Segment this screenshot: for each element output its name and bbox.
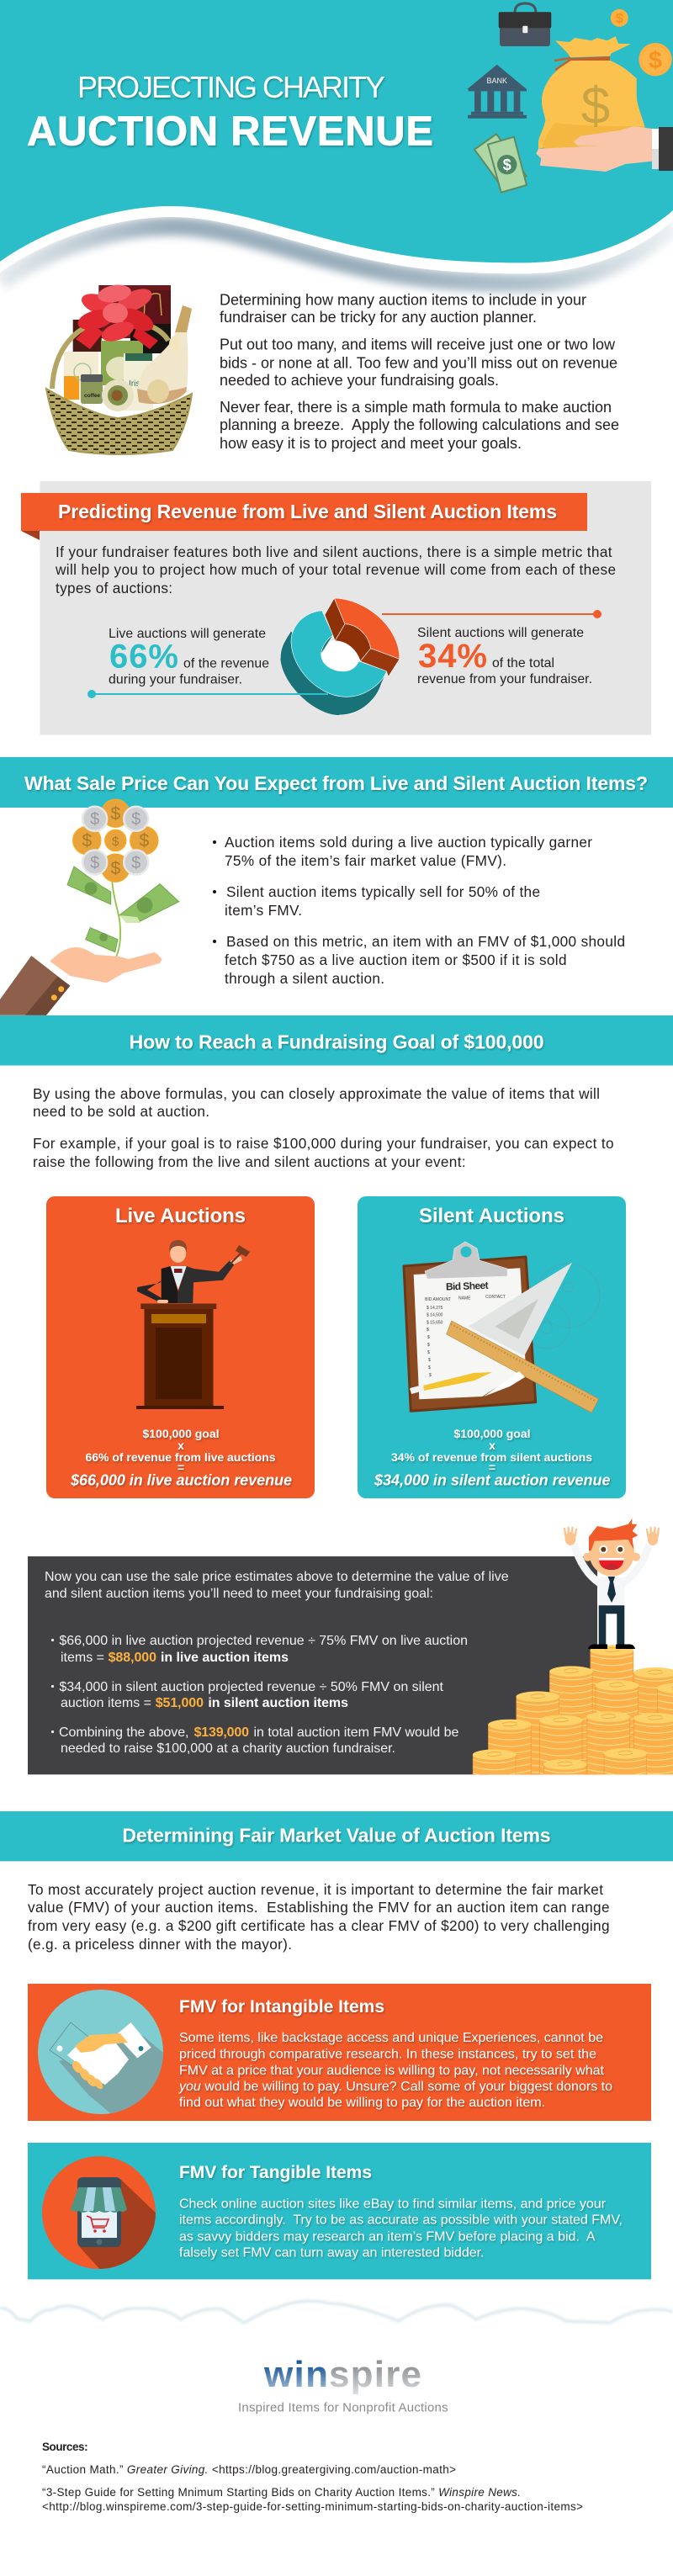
- text block: fundraising goal intro: need to be sold at auction.: [33, 1103, 209, 1120]
- callout: live auctions 66 percent: Live auctions will generate: [109, 627, 266, 641]
- text block: value calculations: $34,000 in silent auction projected revenue ÷ 50% FMV on silent: [59, 1680, 444, 1694]
- section banner: fair market value: Determining Fair Market Value of Auction Items: [122, 1824, 551, 1846]
- text block: fair market value intro: (e.g. a priceless dinner with the mayor).: [28, 1936, 292, 1953]
- callout: silent auctions 34 percent: Silent auctions will generate: [417, 626, 584, 640]
- text block: fundraising goal intro: By using the above formulas, you can closely approximate the value of items that will: [33, 1085, 600, 1102]
- icon: large coin: [639, 43, 672, 76]
- icon: dollar bills: $: [503, 156, 511, 173]
- text block: tangible items: [179, 2197, 623, 2260]
- calculation: silent auction revenue: =: [489, 1460, 495, 1474]
- calculation: silent auction revenue: $34,000 in silent auction revenue: [374, 1472, 611, 1489]
- illustration: coin stacks: [473, 1645, 673, 1775]
- title: PROJECTING CHARITY: [77, 70, 385, 104]
- tagline: Inspired Items for Nonprofit Auctions: [238, 2400, 448, 2414]
- icon: gift basket: coffee: [84, 393, 101, 399]
- text block: tangible items: as savvy bidders may research an item’s FMV before placing a bid. A: [179, 2229, 596, 2244]
- icon: clipboard bid sheet with ruler: $: [427, 1343, 430, 1348]
- icon: gift basket: [46, 283, 192, 454]
- text block: metric explanation: [55, 543, 616, 596]
- text block: tangible items: Check online auction sites like eBay to find similar items, and price your: [179, 2197, 607, 2212]
- section banner: fair market value: [0, 1811, 673, 1861]
- callout: silent auctions 34 percent: [417, 626, 592, 686]
- text block: intangible items: you would be willing to pay. Unsure? Call some of your biggest donors to: [178, 2080, 612, 2094]
- panel: FMV for tangible items: [28, 2143, 651, 2279]
- icon: clipboard bid sheet with ruler: $: [429, 1373, 432, 1378]
- decorative footer cloud edge: [0, 2301, 673, 2323]
- text block: sources: Sources:: [42, 2441, 88, 2453]
- text block: value calculations: auction items =: [61, 1696, 151, 1710]
- panel: live auctions card: [46, 1196, 315, 1498]
- icon: clipboard bid sheet with ruler: $ 14,500: [427, 1312, 443, 1317]
- panel: silent auctions card: [358, 1196, 626, 1498]
- icon: briefcase: [499, 3, 551, 46]
- logo: winspire: [238, 2354, 448, 2414]
- icon: dollar bills: [474, 134, 527, 193]
- text block: intangible items: [178, 2031, 612, 2110]
- text block: intangible items: Some items, like backstage access and unique Experiences, cannot be: [179, 2031, 603, 2045]
- icon: clipboard bid sheet with ruler: $ 15,650: [427, 1321, 443, 1326]
- icon: small coin: [611, 9, 628, 27]
- callout: live auctions 66 percent: during your fundraiser.: [109, 673, 242, 686]
- icon: small coin: $: [616, 12, 623, 26]
- text block: sources: “Auction Math.” Greater Giving. <https://blog.greatergiving.com/auction-math>: [42, 2463, 456, 2476]
- icon: money flower growing from hand: $: [131, 854, 140, 872]
- text block: tangible items: falsely set FMV can turn away an interested bidder.: [179, 2245, 485, 2260]
- callout: live auctions 66 percent: 66%: [109, 638, 178, 675]
- calculation: silent auction revenue: [374, 1427, 611, 1489]
- text block: intangible items: FMV at a price that your audience is willing to pay, not necessarily what: [179, 2064, 605, 2078]
- text block: fair market value intro: To most accurately project auction revenue, it is important to determine the fair market: [28, 1881, 603, 1898]
- icon: bank: [467, 65, 527, 119]
- calculation: live auction revenue: [70, 1427, 292, 1489]
- calculation: live auction revenue: =: [178, 1460, 184, 1474]
- icon: clipboard bid sheet with ruler: $: [427, 1335, 430, 1340]
- callout: silent auctions 34 percent: of the total: [492, 656, 554, 671]
- icon: money flower growing from hand: $: [110, 804, 120, 824]
- panel: predicting revenue: [21, 481, 651, 735]
- section banner: sale price: What Sale Price Can You Expect from Live and Silent Auction Items?: [24, 772, 648, 794]
- text block: metric explanation: types of auctions:: [56, 580, 172, 596]
- text block: value calculations: [45, 1570, 509, 1756]
- text block: metric explanation: If your fundraiser features both live and silent auctions, there is a simple metric that: [56, 543, 612, 560]
- title: [27, 70, 433, 155]
- text block: value calculations: $88,000: [109, 1651, 156, 1665]
- text block: value calculations: in total auction item FMV would be: [254, 1725, 458, 1740]
- text block: fundraising goal intro: [33, 1085, 614, 1170]
- icon: money bag in hand: $: [581, 77, 610, 135]
- text block: value calculations: in silent auction items: [208, 1696, 348, 1710]
- text block: value calculations: needed to raise $100,000 at a charity auction fundraiser.: [61, 1741, 395, 1756]
- icon: money flower growing from hand: $: [90, 810, 99, 829]
- icon: bank: BANK: [486, 77, 507, 85]
- icon: gift basket: Iris: [129, 379, 140, 389]
- icon: clipboard bid sheet with ruler: CONTACT: [485, 1295, 506, 1300]
- icon: clipboard bid sheet with ruler: NAME: [458, 1296, 471, 1301]
- text block: value calculations: and silent auction items you’ll need to meet your fundraising goal:: [45, 1587, 433, 1601]
- text block: fair market value intro: value (FMV) of your auction items. Establishing the FMV for an auction item can range: [28, 1899, 609, 1916]
- icon: money flower growing from hand: $: [131, 810, 140, 829]
- icon: money bag in hand: [536, 36, 673, 172]
- callout: live auctions 66 percent: of the revenue: [183, 656, 269, 671]
- callout: silent auctions 34 percent: 34%: [418, 638, 487, 675]
- section banner: sale price: [0, 757, 673, 808]
- heading ribbon: predicting revenue: Predicting Revenue from Live and Silent Auction Items: [58, 501, 557, 522]
- icon: clipboard bid sheet with ruler: $ 14,275: [427, 1306, 443, 1311]
- text block: value calculations: items =: [61, 1651, 104, 1665]
- text block: intangible items: find out what they would be willing to pay for the auction item.: [179, 2096, 545, 2110]
- callout: silent auctions 34 percent: revenue from your fundraiser.: [417, 672, 592, 686]
- title: AUCTION REVENUE: [27, 109, 433, 155]
- icon: money flower growing from hand: $: [139, 831, 149, 851]
- text block: value calculations: Now you can use the sale price estimates above to determine the value of live: [45, 1570, 509, 1584]
- text block: fundraising goal intro: raise the following from the live and silent auctions at your event:: [33, 1153, 466, 1170]
- calculation: silent auction revenue: 34% of revenue from silent auctions: [391, 1450, 592, 1464]
- icon: handshake: [38, 1990, 168, 2116]
- text block: sources: “3-Step Guide for Setting Mnimum Starting Bids on Charity Auction Items.” Winspire News.: [42, 2486, 521, 2499]
- panel: item value calculations: [28, 1556, 597, 1774]
- heading: live auctions: Live Auctions: [115, 1205, 246, 1227]
- leader line: silent auctions: [382, 610, 601, 618]
- bulleted list: sale price facts: [213, 834, 625, 987]
- text block: introduction: Determining how many auction items to include in your: [220, 291, 586, 308]
- text block: introduction: Put out too many, and items will receive just one or two low: [220, 337, 616, 353]
- calculation: live auction revenue: x: [178, 1439, 184, 1452]
- panel: FMV for intangible items: [28, 1984, 651, 2121]
- text block: fundraising goal intro: For example, if your goal is to raise $100,000 during your fundraiser, you can expect to: [33, 1135, 614, 1152]
- icon: money flower growing from hand: $: [82, 831, 92, 851]
- icon: money flower growing from hand: $: [110, 859, 120, 878]
- text block: value calculations: Combining the above,: [59, 1725, 188, 1740]
- panel: header banner: [0, 0, 673, 283]
- section banner: fundraising goal: How to Reach a Fundraising Goal of $100,000: [130, 1031, 544, 1053]
- heading: silent auctions: Silent Auctions: [419, 1205, 564, 1227]
- text block: value calculations: $51,000: [156, 1696, 204, 1710]
- calculation: live auction revenue: $100,000 goal: [142, 1427, 220, 1440]
- calculation: silent auction revenue: $100,000 goal: [453, 1427, 531, 1440]
- heading ribbon: predicting revenue: [21, 493, 587, 540]
- text block: introduction: Never fear, there is a simple math formula to make auction: [220, 399, 612, 416]
- calculation: live auction revenue: $66,000 in live auction revenue: [70, 1472, 292, 1489]
- text block: sources: <http://blog.winspireme.com/3-step-guide-for-setting-minimum-starting-bids-on-charity-auction-items>: [42, 2500, 583, 2513]
- heading: intangible items: FMV for Intangible Items: [179, 1997, 384, 2017]
- icon: money flower growing from hand: [0, 799, 179, 1015]
- bulleted list: sale price facts: 75% of the item’s fair market value (FMV).: [225, 852, 506, 869]
- bulleted list: sale price facts: item’s FMV.: [225, 902, 302, 919]
- text block: sources: [42, 2441, 583, 2513]
- heading: tangible items: FMV for Tangible Items: [179, 2163, 372, 2182]
- icon: large coin: $: [649, 47, 662, 74]
- text block: introduction: how easy it is to project and meet your goals.: [220, 435, 522, 452]
- icon: clipboard bid sheet with ruler: $: [427, 1350, 430, 1355]
- icon: mobile storefront: [42, 2156, 160, 2271]
- donut chart: 66 percent live and 34 percent silent: [280, 598, 400, 715]
- leader line: live auctions: [87, 690, 328, 698]
- icon: clipboard bid sheet with ruler: $: [428, 1365, 431, 1370]
- logo: winspire: win: [263, 2354, 328, 2395]
- icon: clipboard bid sheet with ruler: $: [427, 1328, 429, 1333]
- text block: introduction: needed to achieve your fundraising goals.: [220, 372, 499, 389]
- text block: value calculations: $66,000 in live auction projected revenue ÷ 75% FMV on live auction: [59, 1634, 468, 1648]
- icon: clipboard bid sheet with ruler: $: [428, 1358, 431, 1363]
- text block: intangible items: priced through comparative research. In these instances, try to set the: [179, 2048, 596, 2061]
- icon: clipboard bid sheet with ruler: [404, 1242, 600, 1413]
- text block: fair market value intro: from very easy (e.g. a $200 gift certificate has a clear FMV of $200) to very challenging: [28, 1917, 609, 1934]
- section banner: fundraising goal: [0, 1015, 673, 1065]
- text block: introduction: bids - or none at all. Too few and you’ll miss out on revenue: [220, 355, 617, 372]
- bulleted list: sale price facts: Auction items sold during a live auction typically garner: [225, 834, 592, 851]
- text block: tangible items: items accordingly. Try to be as accurate as possible with your stated FMV,: [179, 2213, 623, 2228]
- text block: value calculations: in live auction items: [161, 1651, 289, 1665]
- calculation: live auction revenue: 66% of revenue from live auctions: [86, 1450, 276, 1464]
- bulleted list: sale price facts: Based on this metric, an item with an FMV of $1,000 should: [226, 933, 625, 950]
- bulleted list: sale price facts: Silent auction items typically sell for 50% of the: [226, 883, 540, 900]
- text block: fair market value intro: [28, 1881, 609, 1953]
- illustration: cheering man: [564, 1519, 659, 1649]
- text block: introduction: planning a breeze. Apply the following calculations and see: [220, 416, 619, 433]
- logo: winspire: spire: [329, 2354, 421, 2395]
- text block: introduction: [220, 291, 619, 452]
- icon: money flower growing from hand: $: [90, 854, 99, 872]
- text block: value calculations: $139,000: [194, 1725, 249, 1740]
- icon: clipboard bid sheet with ruler: Bid Sheet: [446, 1280, 489, 1293]
- bulleted list: sale price facts: through a silent auction.: [225, 970, 384, 987]
- calculation: silent auction revenue: x: [489, 1439, 495, 1452]
- bulleted list: sale price facts: fetch $750 as a live auction item or $500 if it is sold: [225, 951, 567, 968]
- icon: money flower growing from hand: $: [112, 835, 119, 849]
- callout: live auctions 66 percent: [109, 627, 269, 686]
- text block: metric explanation: will help you to project how much of your total revenue will come from each of these: [55, 561, 616, 578]
- text block: introduction: fundraiser can be tricky for any auction planner.: [220, 309, 537, 326]
- icon: auctioneer at podium: [136, 1240, 250, 1409]
- icon: clipboard bid sheet with ruler: BID AMOUNT: [425, 1297, 451, 1302]
